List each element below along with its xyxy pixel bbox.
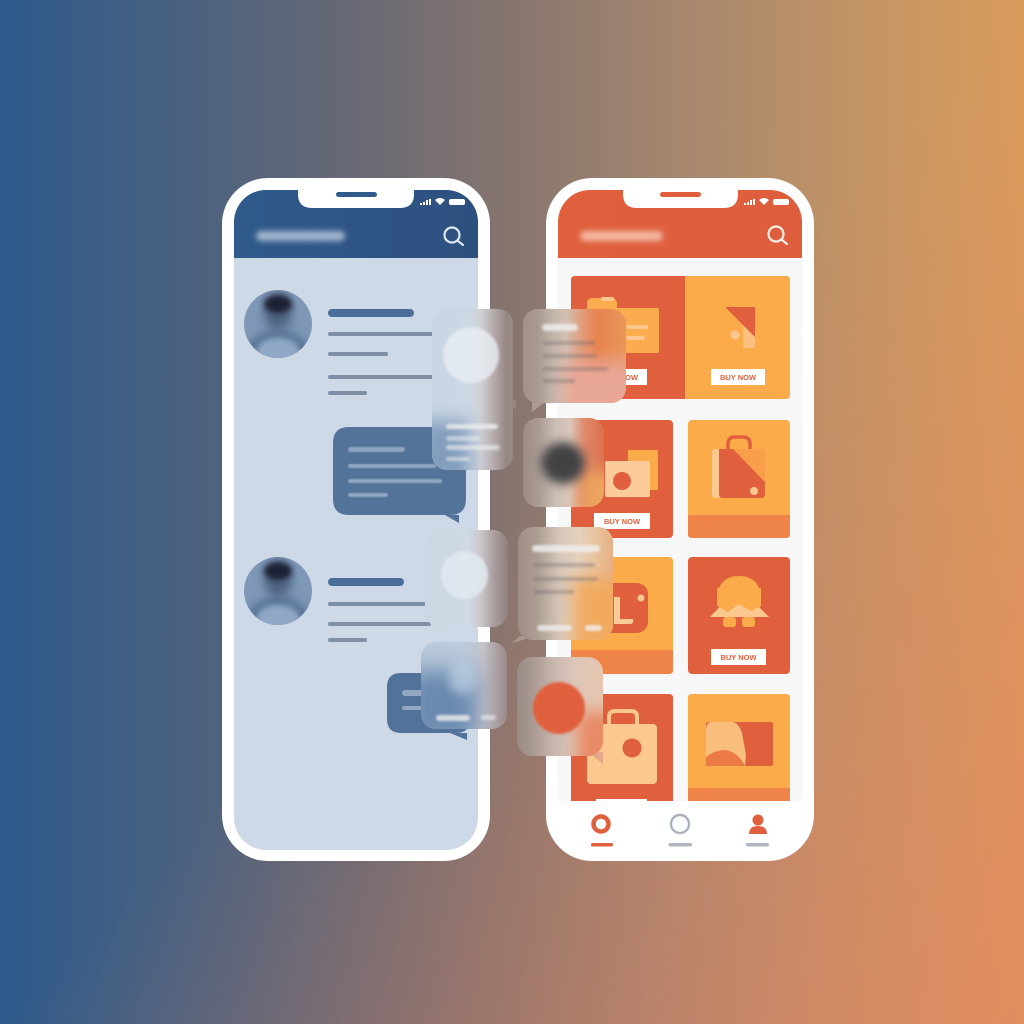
phone: chat app: [222, 178, 490, 861]
pink reflection: [565, 361, 645, 421]
lines: [434, 714, 497, 722]
blurred title: [580, 231, 663, 241]
product tile 3: [571, 420, 673, 538]
red reflection: [577, 712, 627, 772]
chat bubble one: [333, 427, 466, 523]
glass card: star image: [421, 642, 507, 729]
glass card: profile with lines: [432, 309, 513, 470]
avatar two: [244, 557, 312, 625]
lines: [445, 422, 501, 462]
nav icon: home: [591, 816, 613, 846]
search icon: [768, 226, 787, 244]
product tile 6: [688, 557, 790, 674]
speaker: [336, 192, 377, 197]
circle: [443, 327, 499, 383]
phone: shop app: [546, 178, 814, 861]
status icons: [744, 198, 789, 205]
avatar one: [244, 290, 312, 358]
chat header bar: [234, 190, 478, 258]
product tile 3: BUY NOW: [604, 517, 641, 526]
product tile 8: [688, 694, 790, 801]
glass card: light circle bubble: [425, 530, 508, 627]
glass card: text bubble lower: [518, 527, 613, 640]
phone mockups: [222, 178, 814, 861]
blurred star: [449, 660, 477, 694]
product tile 5: [571, 557, 673, 674]
product tile 4: [688, 420, 790, 538]
product tile 2: BUY NOW: [720, 373, 757, 382]
blue reflection: [418, 421, 470, 487]
lines: [540, 322, 609, 384]
product tile 1: [571, 276, 685, 399]
notch: [623, 188, 738, 208]
glass card: red circle: [517, 657, 603, 756]
circle: [441, 551, 488, 599]
chat bubble two: [387, 673, 470, 740]
lines: [530, 544, 604, 633]
message lines one: [328, 309, 433, 395]
message lines two: [328, 578, 431, 642]
bottom navigation: [558, 801, 802, 850]
product tile 2: [685, 276, 790, 399]
product tile 7: [571, 694, 673, 801]
glass card: blurred avatar: [523, 418, 604, 507]
orange reflection: [573, 577, 633, 657]
blue reflection: [407, 670, 477, 740]
search icon: [444, 228, 463, 245]
speaker: [660, 192, 701, 197]
dark circle: [541, 442, 585, 484]
shop header bar: [558, 190, 802, 258]
status icons: [420, 198, 465, 205]
product tile 1: BUY NOW: [602, 373, 639, 382]
red circle: [533, 682, 585, 734]
notch: [298, 188, 414, 208]
glass card: text bubble top: [523, 309, 626, 403]
blurred title: [256, 231, 345, 241]
nav icon: profile: [746, 814, 769, 846]
product tile 6: BUY NOW: [720, 653, 757, 662]
orange reflection: [581, 470, 621, 520]
nav icon: search: [668, 815, 692, 846]
